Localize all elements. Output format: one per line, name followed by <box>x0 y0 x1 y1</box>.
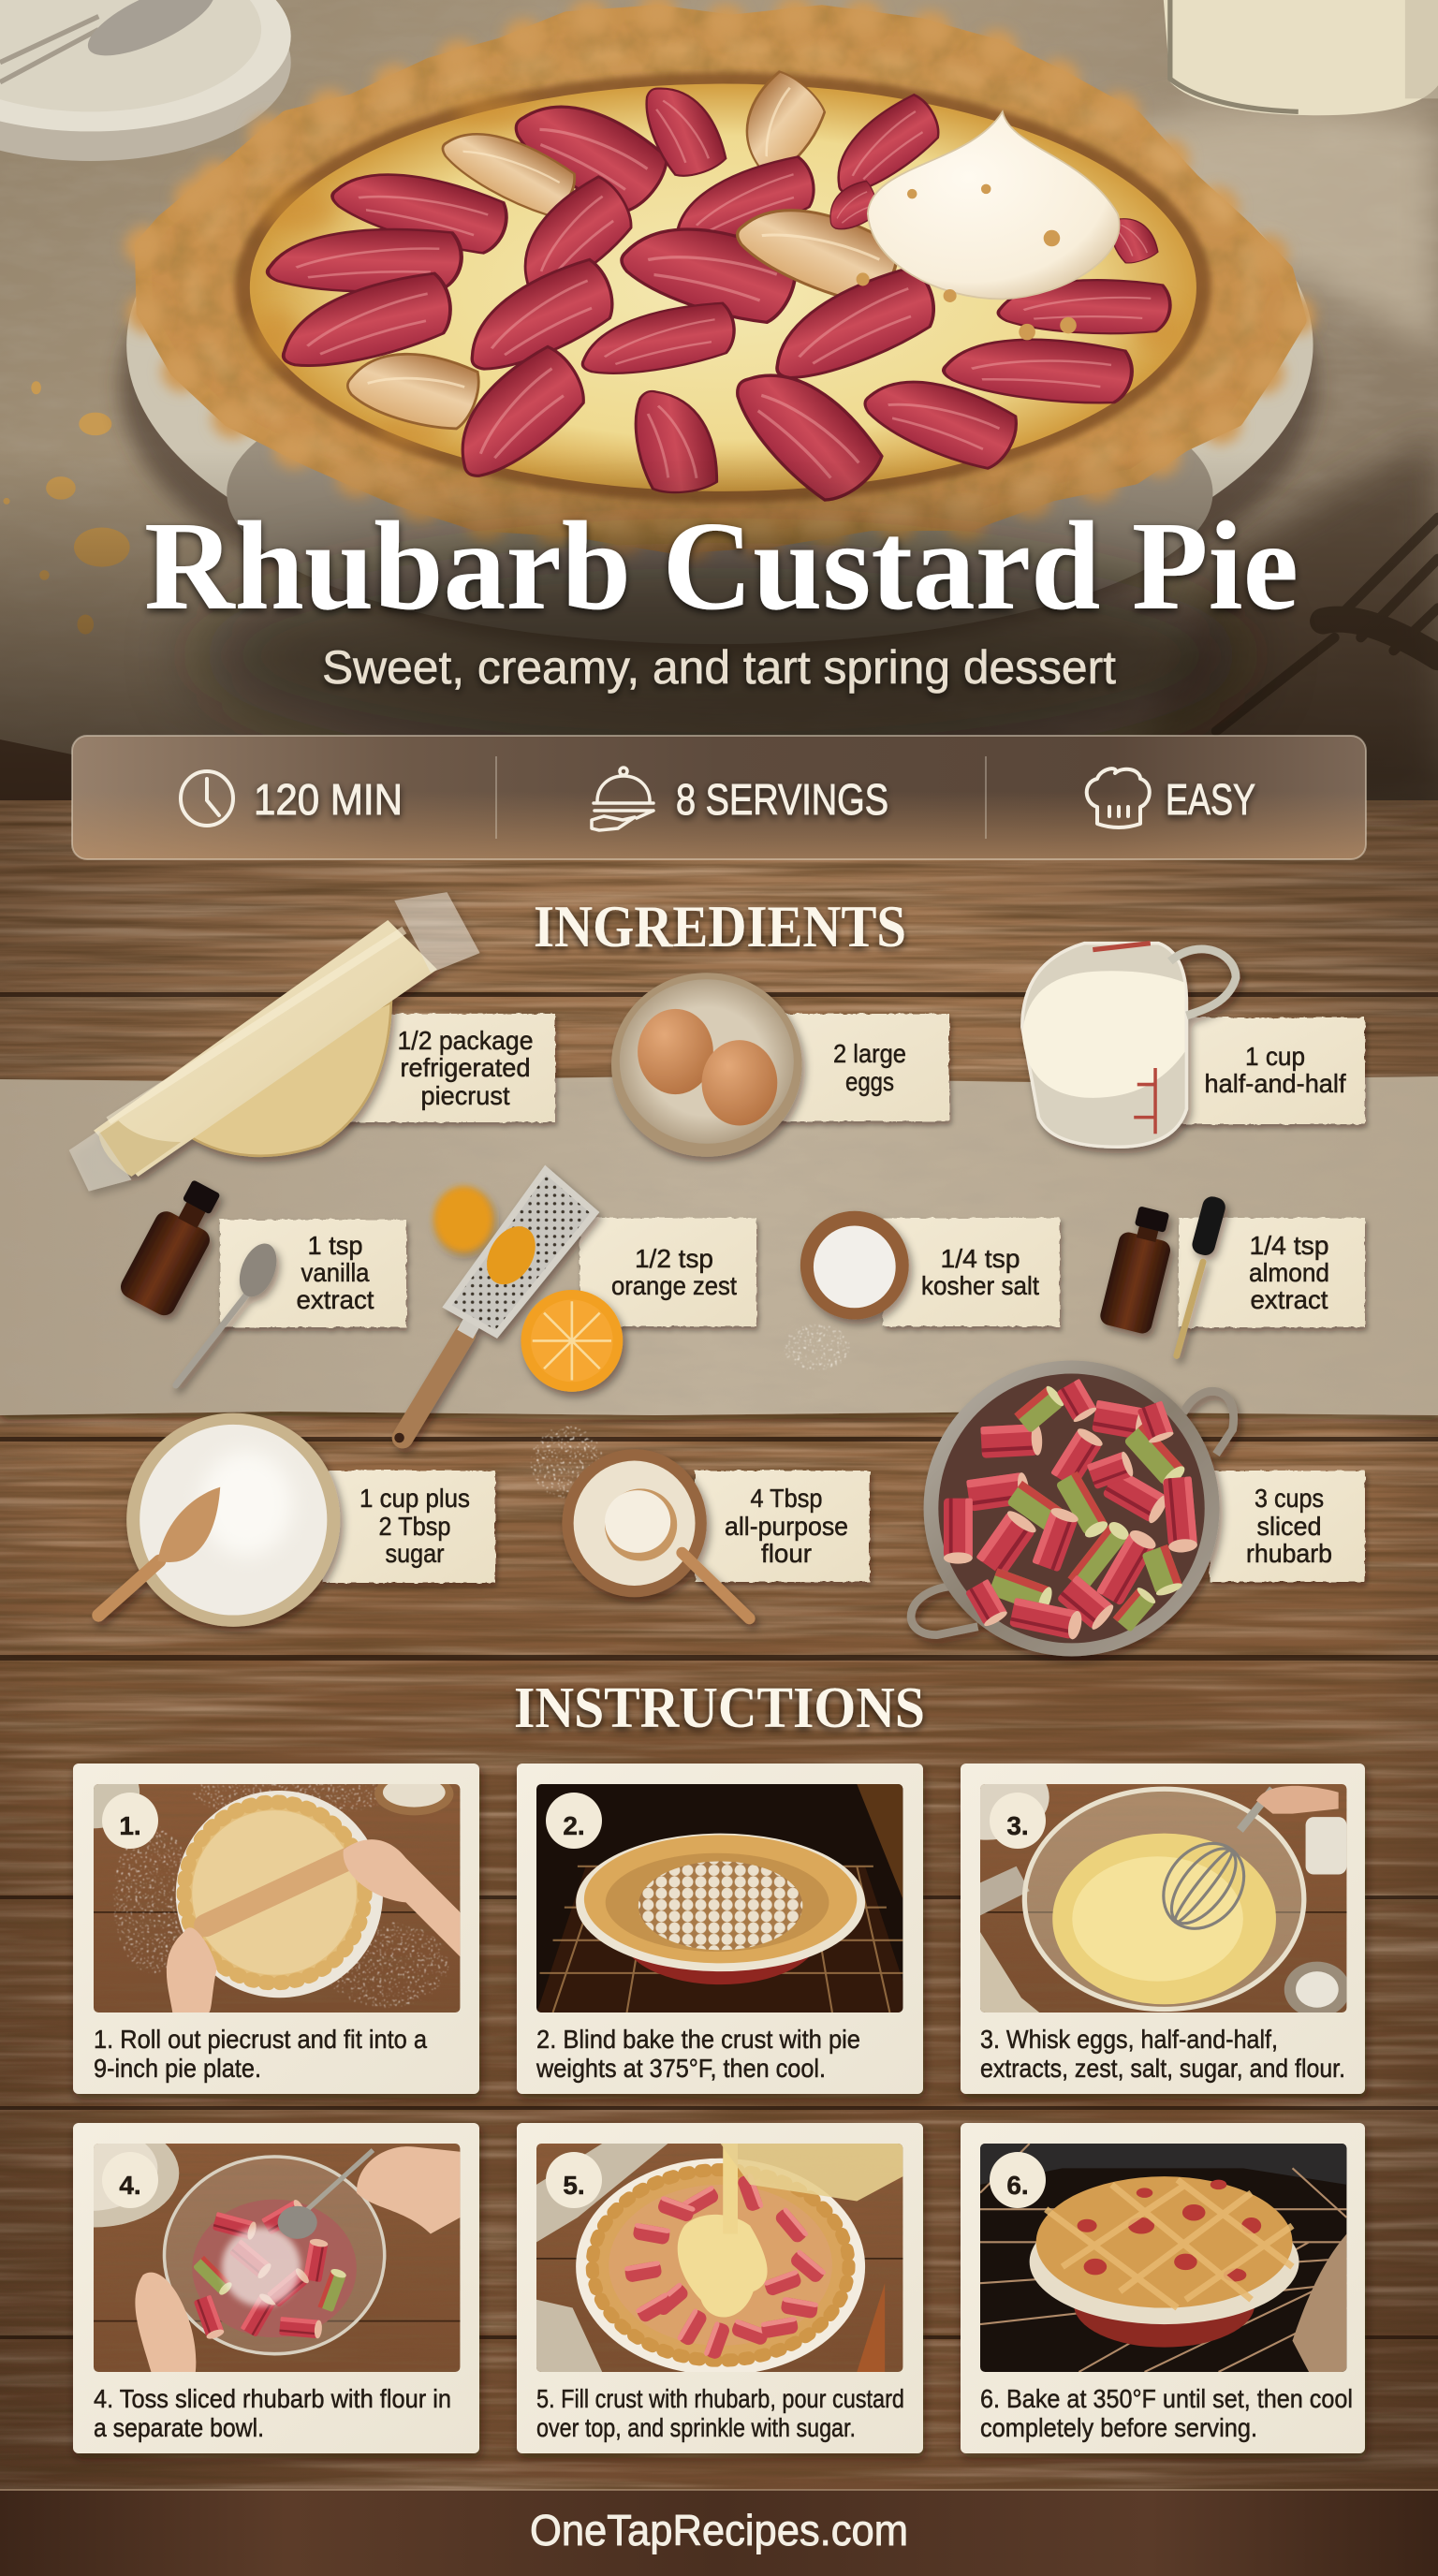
stats bar <box>72 736 1366 859</box>
step text <box>94 2384 451 2442</box>
ingredient label: piecrust: piecrust <box>421 1081 510 1110</box>
icon: bowl of kosher salt <box>784 1211 909 1370</box>
step card 4 <box>69 2123 487 2464</box>
step text: 1. Roll out piecrust and fit into a <box>94 2025 427 2054</box>
custard <box>250 84 1196 491</box>
badge: step number <box>102 2152 158 2208</box>
step text: 6. Bake at 350°F until set, then cool <box>980 2384 1353 2413</box>
ingredient label: rhubarb <box>1210 1471 1365 1582</box>
step text: 5. Fill crust with rhubarb, pour custard <box>536 2384 904 2413</box>
hero photo: pie on linen <box>0 0 1438 800</box>
step text: extracts, zest, salt, sugar, and flour. <box>980 2054 1345 2083</box>
icon: zest grater and orange <box>394 1170 623 1442</box>
ingredient label: eggs: eggs <box>845 1067 894 1096</box>
ingredient label: almond extract: extract <box>1251 1285 1328 1314</box>
badge: step number: 6. <box>1006 2171 1029 2200</box>
ingredient label: orange zest: orange zest <box>611 1271 737 1300</box>
step card 5 <box>517 2123 923 2453</box>
step text: 9-inch pie plate. <box>94 2054 261 2083</box>
ingredient label: sugar: 1 cup plus <box>360 1484 470 1513</box>
step text <box>980 2384 1353 2442</box>
icon: measuring cup of half-and-half <box>1022 944 1236 1147</box>
step text: over top, and sprinkle with sugar. <box>536 2413 856 2442</box>
step text: a separate bowl. <box>94 2413 264 2442</box>
step text: 2. Blind bake the crust with pie <box>536 2025 860 2054</box>
ingredient label: half-and-half: half-and-half <box>1204 1069 1346 1098</box>
ingredient label: rhubarb: rhubarb <box>1246 1539 1332 1568</box>
step text <box>94 2025 427 2083</box>
ingredient label: sugar: sugar <box>386 1539 444 1568</box>
badge: step number: 1. <box>119 1811 141 1840</box>
ingredients heading: INGREDIENTS <box>534 893 906 959</box>
step text <box>980 2025 1345 2083</box>
ingredient label: orange zest: 1/2 tsp <box>635 1244 713 1273</box>
ingredient label: almond extract: 1/4 tsp <box>1249 1231 1329 1260</box>
ingredient label: vanilla <box>220 1220 406 1327</box>
ingredient label: almond extract: almond <box>1249 1258 1329 1287</box>
ingredient label: almond extract <box>1179 1218 1365 1327</box>
badge: step number <box>546 2152 602 2208</box>
badge: step number: 4. <box>119 2171 141 2200</box>
icon: glass of milk <box>1164 0 1438 115</box>
ingredient label: vanilla: 1 tsp <box>307 1231 363 1260</box>
icon: fork <box>1216 518 1438 731</box>
ingredient label: sugar: 2 Tbsp <box>378 1512 451 1541</box>
step text <box>536 2025 860 2083</box>
icon: bowl of flour and spoon <box>531 1427 749 1618</box>
stat: time: 120 MIN <box>254 775 403 824</box>
whipped cream <box>857 111 1120 340</box>
ingredient label: kosher salt: kosher salt <box>921 1271 1039 1300</box>
ingredient label: flour: flour <box>761 1539 812 1568</box>
ingredient label: rhubarb: 3 cups <box>1255 1484 1324 1513</box>
stat: servings: 8 SERVINGS <box>676 775 888 824</box>
step card 1 <box>48 1756 479 2094</box>
icon: almond extract bottle and dropper <box>1098 1194 1227 1355</box>
ingredient label: flour <box>695 1471 870 1582</box>
pie crust <box>143 13 1299 546</box>
footer band <box>0 2489 1438 2576</box>
icon: serving cloche <box>592 768 653 830</box>
icon: pie crust roll <box>69 892 480 1192</box>
pie plate <box>120 72 1316 657</box>
badge: step number <box>990 1793 1046 1849</box>
ingredient label: flour: all-purpose <box>725 1512 848 1541</box>
ingredient label: half-and-half <box>1179 1017 1365 1124</box>
step text: weights at 375°F, then cool. <box>536 2054 826 2083</box>
ingredient label: sugar <box>323 1471 495 1583</box>
step text: 4. Toss sliced rhubarb with flour in <box>94 2384 451 2413</box>
badge: step number: 5. <box>563 2171 585 2200</box>
wood table background <box>0 786 1438 2576</box>
ingredient label: flour: 4 Tbsp <box>751 1484 822 1513</box>
badge: step number <box>546 1793 602 1849</box>
stat: difficulty: EASY <box>1166 775 1255 824</box>
ingredient label: piecrust: refrigerated <box>401 1053 530 1082</box>
ingredient label: rhubarb: sliced <box>1256 1512 1322 1541</box>
step card 3 <box>924 1754 1365 2094</box>
footer website: OneTapRecipes.com <box>530 2506 908 2554</box>
icon: chef hat <box>1087 768 1150 827</box>
badge: step number <box>102 1793 158 1849</box>
subtitle: Sweet, creamy, and tart spring dessert <box>322 641 1116 694</box>
ingredient label: eggs: 2 large <box>833 1039 906 1068</box>
ingredient label: vanilla: vanilla <box>301 1258 370 1287</box>
rhubarb slices <box>267 66 1171 515</box>
icon: stacked plates and spoons <box>0 0 291 161</box>
icon: bowl of eggs <box>611 973 802 1157</box>
ingredient label: vanilla: extract <box>296 1285 374 1314</box>
step text <box>536 2384 904 2442</box>
step text: 3. Whisk eggs, half-and-half, <box>980 2025 1278 2054</box>
ingredient label: eggs <box>749 1014 949 1121</box>
step card 6 <box>961 2123 1365 2453</box>
ingredient label: piecrust: 1/2 package <box>397 1026 534 1055</box>
ingredient illustrations <box>69 892 1236 1656</box>
ingredient label: orange zest <box>580 1218 756 1326</box>
crumbs <box>4 381 130 635</box>
ingredient label: piecrust <box>318 1014 555 1122</box>
badge: step number: 3. <box>1006 1811 1029 1840</box>
icon: bowl of sugar and scoop <box>98 1413 340 1627</box>
ingredient label: half-and-half: 1 cup <box>1245 1042 1305 1071</box>
linen table runner <box>0 1076 1438 1415</box>
ingredient label: kosher salt <box>883 1218 1060 1326</box>
step text: completely before serving. <box>980 2413 1257 2442</box>
instructions heading: INSTRUCTIONS <box>514 1676 925 1740</box>
title: Rhubarb Custard Pie <box>144 496 1299 637</box>
icon: vanilla bottle and spoon <box>117 1173 284 1385</box>
icon: clock <box>181 771 233 826</box>
badge: step number: 2. <box>563 1811 585 1840</box>
ingredient label: kosher salt: 1/4 tsp <box>940 1244 1020 1273</box>
badge: step number <box>990 2152 1046 2208</box>
step card 2 <box>517 1764 923 2094</box>
icon: colander of sliced rhubarb <box>911 1360 1234 1656</box>
